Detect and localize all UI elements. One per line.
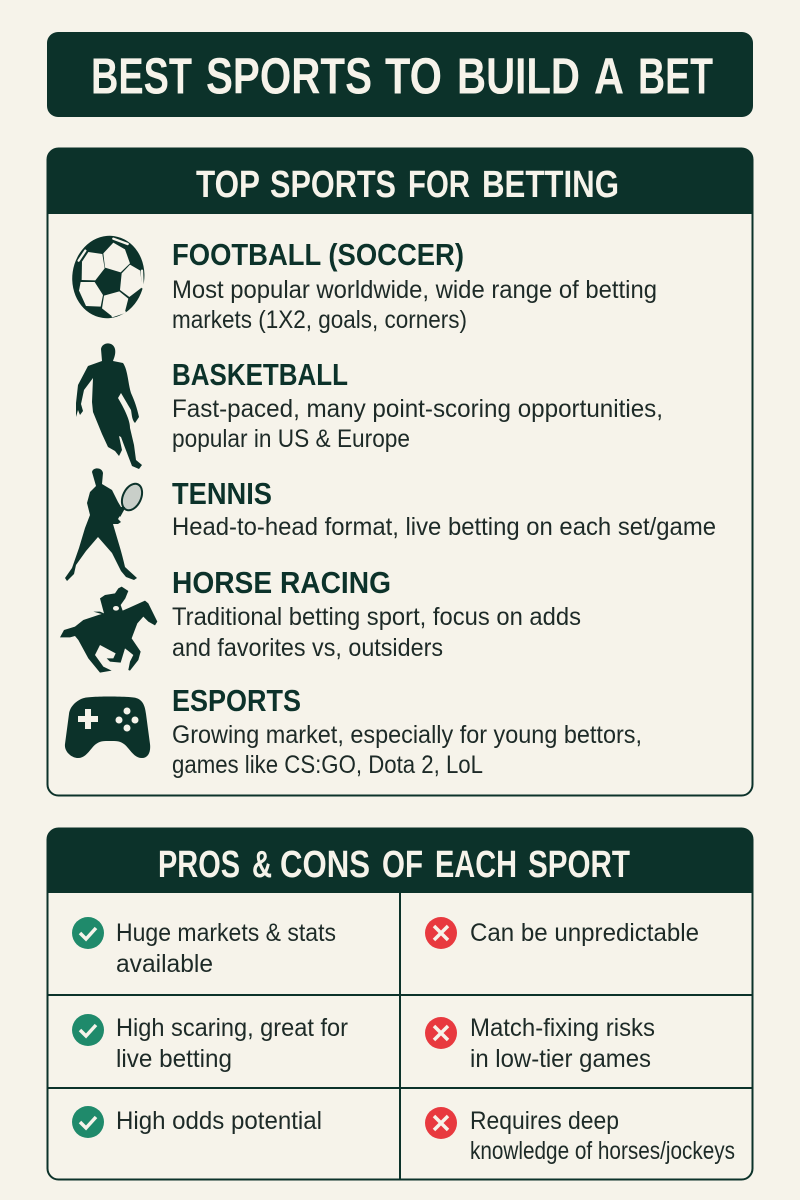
esports text: ESPORTS [172,683,301,718]
basketball text: popular in US & Europe [172,425,410,453]
panel heading: pros and cons: CONS [280,844,370,886]
esports text [172,683,642,779]
panel heading: top sports: SPORTS [270,164,396,206]
panel heading: pros and cons: OF [382,844,423,886]
football text: Most popular worldwide, wide range of betting [172,276,657,304]
title: BEST [91,48,192,104]
icon: tennis player silhouette [65,468,146,581]
tennis text: TENNIS [172,476,272,511]
title: BET [638,48,713,104]
icon: game controller [65,696,150,758]
row 3 con [425,1107,735,1165]
tennis text: Head-to-head format, live betting on each set/game [172,513,716,541]
basketball text [172,357,663,453]
basketball text: BASKETBALL [172,357,348,392]
row 1 pro: Huge markets & stats [116,919,336,947]
panel heading: top sports: FOR [408,164,470,206]
panel: top sports for betting [47,148,753,796]
panel heading: top sports [47,148,753,214]
row 1 pro [72,917,336,978]
panel heading: pros and cons: & [252,844,272,886]
title: SPORTS [206,48,372,104]
row 2 pro: live betting [116,1045,232,1073]
tennis text [172,476,716,541]
football text: markets (1X2, goals, corners) [172,306,467,334]
panel: pros and cons [47,828,753,1180]
icon: soccer ball [67,231,150,323]
row 1 con: Can be unpredictable [470,919,699,947]
football text [172,237,657,334]
icon: horse and jockey silhouette [60,587,157,673]
row 2 pro: High scaring, great for [116,1014,348,1042]
title: TO [385,48,442,104]
panel heading: top sports: TOP [196,164,260,206]
esports text: games like CS:GO, Dota 2, LoL [172,751,483,779]
row 2 con [425,1014,655,1073]
row 2 pro [72,1014,348,1073]
title: BUILD [457,48,580,104]
row 2 con: in low-tier games [470,1045,651,1073]
row 1 pro: available [116,950,213,978]
panel heading: pros and cons: PROS [158,844,240,886]
title: A [594,48,624,104]
panel heading: top sports: BETTING [482,164,619,206]
row 2 con: Match-fixing risks [470,1014,655,1042]
basketball text: Fast-paced, many point-scoring opportunities, [172,395,663,423]
icon: basketball player silhouette [76,343,142,469]
row 3 con: knowledge of horses/jockeys [470,1137,735,1165]
panel heading: pros and cons: SPORT [528,844,630,886]
football text: FOOTBALL (SOCCER) [172,237,464,272]
esports text: Growing market, especially for young bettors, [172,721,642,749]
horse racing text: and favorites vs, outsiders [172,634,443,662]
title [47,32,753,117]
horse racing text: Traditional betting sport, focus on adds [172,603,581,631]
panel heading: pros and cons [47,828,753,893]
horse racing text: HORSE RACING [172,565,391,600]
row 3 pro: High odds potential [116,1107,322,1135]
horse racing text [172,565,581,662]
panel heading: pros and cons: EACH [435,844,517,886]
row 3 con: Requires deep [470,1107,619,1135]
